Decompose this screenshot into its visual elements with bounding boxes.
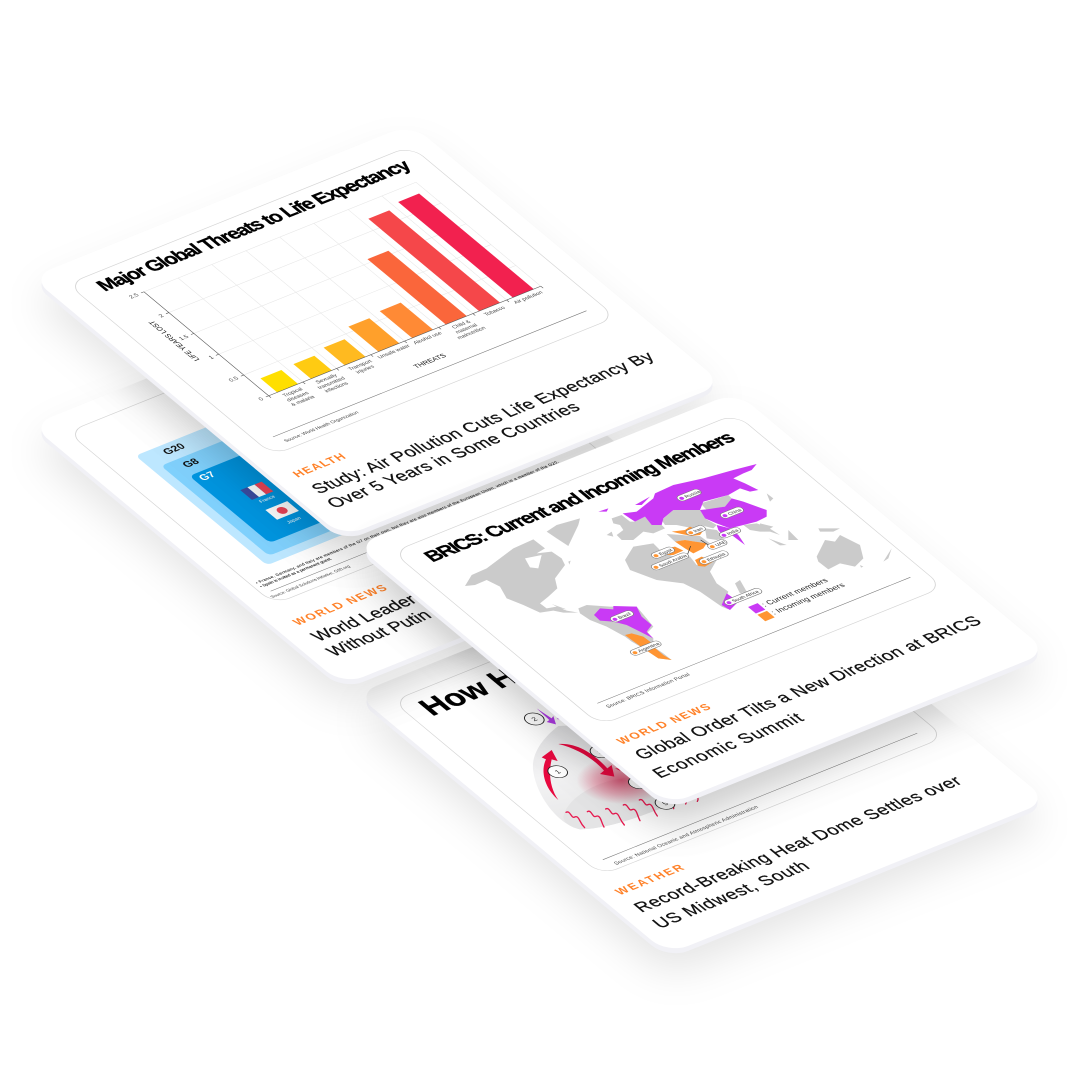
map label: South Africa: South Africa <box>731 590 761 604</box>
x axis labels: diseases <box>286 391 311 403</box>
map: Oceania <box>760 493 892 569</box>
panel: weather card <box>356 541 1048 976</box>
source: BRICS portal: Source: BRICS Information Portal <box>605 672 692 709</box>
x axis labels: & malaria <box>290 394 317 408</box>
text block: heat dome note: creating further warming and <box>769 727 847 761</box>
x axis labels: Unsafe water <box>377 344 412 360</box>
label: G20: G20 <box>160 442 188 457</box>
x axis labels: Sexually <box>315 373 339 385</box>
map label: India: India <box>726 528 741 536</box>
label: France: France <box>258 495 277 504</box>
source: NOAA: Source: National Oceanic and Atmospheric Administration <box>613 805 760 866</box>
map label: Iran: Iran <box>692 527 705 534</box>
headline: BRICS summit: Economic Summit <box>648 710 808 781</box>
bar chart: life years lost by threat <box>119 180 569 428</box>
map label: Egypt: Egypt <box>658 548 675 557</box>
label: G8: G8 <box>180 457 202 470</box>
map label: Iran <box>684 525 707 536</box>
map label: Russia: Russia <box>683 490 703 499</box>
y axis values: 2 <box>157 313 166 319</box>
map label: Ethiopia <box>698 550 730 565</box>
callout: step 5: 5 <box>661 800 670 807</box>
text block: heat dome note: increasing likelihood of wildfires. <box>775 721 879 765</box>
bars <box>163 194 534 392</box>
x axis labels: maternal <box>454 323 479 335</box>
y axis values: 1.5 <box>177 334 191 342</box>
map label: India <box>718 526 743 539</box>
x axis labels <box>280 290 555 408</box>
panel: G7 world leaders card <box>42 393 596 712</box>
x axis labels: Child & <box>451 319 473 330</box>
headline: world leaders: World Leaders Meet at G20 Summit <box>306 525 586 644</box>
panel: health card <box>31 124 723 559</box>
footnotes: • France, Germany, and Italy are members of the G7 on their own, but they are also members of the European Union, which is a member of the G20. <box>254 460 560 585</box>
map label: China <box>719 506 745 519</box>
heading: heat dome: How Heat Domes Form <box>411 574 749 721</box>
headline: heat dome: Record-Breaking Heat Dome Settles over <box>629 773 966 915</box>
heading: BRICS: BRICS: Current and Incoming Members <box>420 429 741 566</box>
y axis title: LIFE YEARS LOST <box>147 319 202 362</box>
callout: step 2: 2 <box>530 716 540 723</box>
footnotes: • Spain is invited as a permanent guest. <box>258 557 333 588</box>
y axis values: 2.5 <box>128 292 141 300</box>
x axis labels: Alcohol use <box>412 331 444 346</box>
map label: China: China <box>727 508 744 517</box>
callout: step 5 <box>651 795 679 812</box>
callout: step 1 <box>544 763 572 780</box>
category label: weather: WEATHER <box>612 862 688 897</box>
x axis labels: infections <box>324 381 351 394</box>
x axis labels: malnutrition <box>456 326 488 341</box>
y axis values <box>128 292 266 404</box>
y axis values: 0 <box>257 396 266 402</box>
map label: Saudi Arabia <box>650 552 691 571</box>
headline: heat dome: US Midwest, South <box>648 858 814 931</box>
callout: step 3 <box>586 743 614 760</box>
headline: BRICS summit: Global Order Tilts a New Direction at BRICS <box>630 613 986 763</box>
map label: South Africa <box>723 587 764 606</box>
y axis values: 0.5 <box>227 375 241 383</box>
callout: step 4: 4 <box>634 780 644 786</box>
nested diagram: G20, G8, G7 <box>135 339 557 565</box>
map label: Egypt <box>650 546 676 559</box>
legend: : Current members <box>760 577 830 608</box>
map label: Brazil <box>609 610 635 623</box>
map label: Saudi Arabia: Saudi Arabia <box>658 554 689 568</box>
map label: Ethiopia: Ethiopia <box>706 552 727 563</box>
label: G7: G7 <box>196 470 219 483</box>
label: Japan: Japan <box>286 516 303 525</box>
category label: world news: WORLD NEWS <box>614 702 714 747</box>
map: Americas <box>465 497 672 660</box>
x axis labels: injuries <box>355 364 376 375</box>
x axis labels: Transport <box>347 359 374 372</box>
panel: BRICS card <box>356 392 1048 827</box>
x axis title: THREATS <box>412 352 449 370</box>
map label: Argentina <box>629 640 663 656</box>
diagram: heat dome <box>520 708 707 829</box>
headline: air pollution: Study: Air Pollution Cuts Life Expectancy By <box>307 348 658 497</box>
map label: Russia <box>675 488 703 502</box>
x axis labels: Air pollution <box>513 290 545 305</box>
x axis labels: transmitted <box>317 376 347 390</box>
source: Global Solutions: Source: Global Solutions Initiative, G20.org <box>269 564 352 599</box>
source: WHO: Source: World Health Organization <box>283 410 361 444</box>
map label: Brazil: Brazil <box>617 612 633 620</box>
heading: major global threats: Major Global Threats to Life Expectancy <box>92 157 417 295</box>
callout: step 2 <box>520 711 548 727</box>
map: Eurasia and Africa <box>607 464 780 610</box>
map label: UAE <box>706 539 729 550</box>
x axis labels: Tobacco <box>483 306 507 317</box>
icon: Japan flag <box>265 501 299 520</box>
icon: France flag <box>240 482 273 500</box>
headline: air pollution: Over 5 Years in Some Countries <box>322 399 584 511</box>
category label: world news: WORLD NEWS <box>290 583 390 628</box>
callout: step 4 <box>624 774 652 791</box>
callout: step 1: 1 <box>553 769 563 775</box>
x axis labels: Tropical <box>282 387 305 398</box>
callout: step 3: 3 <box>596 749 605 755</box>
legend: : Incoming members <box>769 582 847 616</box>
map label: UAE: UAE <box>714 540 729 548</box>
map label: Argentina: Argentina <box>637 642 662 654</box>
headline: world leaders: Without Putin <box>322 607 436 659</box>
legend <box>748 574 848 621</box>
y axis values: 1 <box>207 355 216 361</box>
category label: health: HEALTH <box>290 452 349 480</box>
